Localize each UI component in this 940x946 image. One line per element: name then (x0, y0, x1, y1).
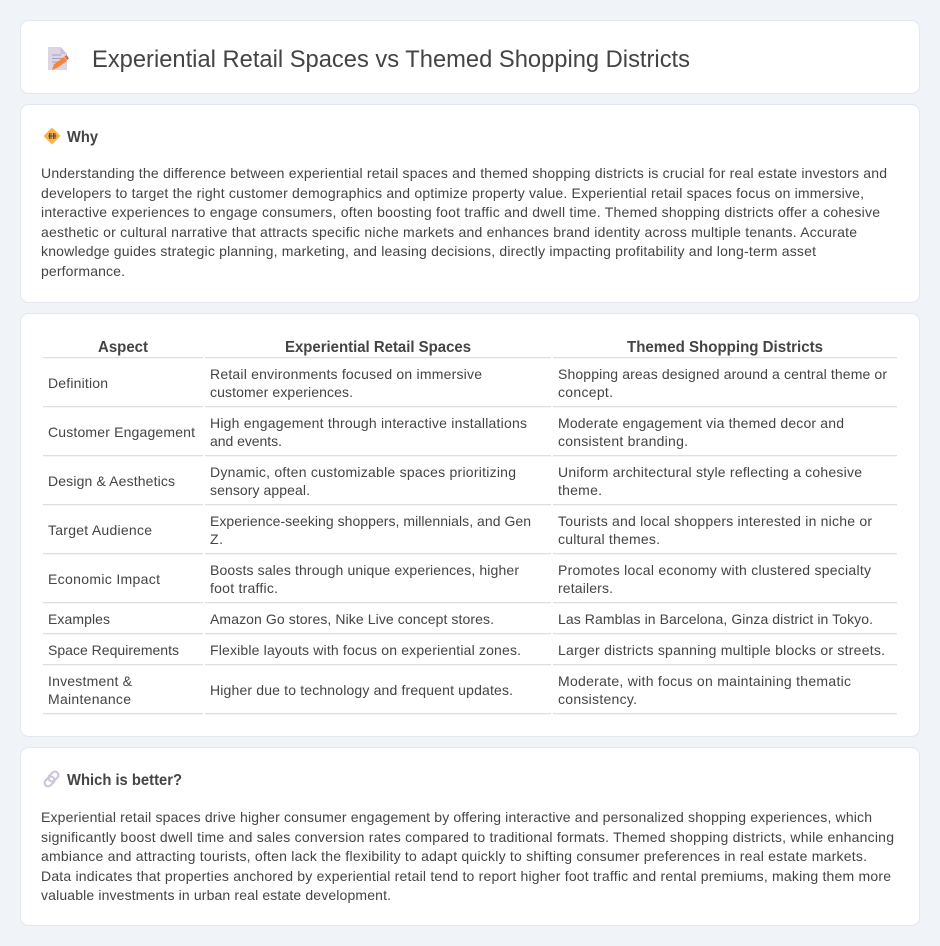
row: definition: Definition (48, 375, 108, 391)
row: definition: Retail environments focused on immersive (210, 366, 482, 382)
row: examples: Las Ramblas in Barcelona, Ginza district in Tokyo. (558, 611, 873, 627)
row: definition: concept. (558, 384, 613, 400)
row: customer engagement: High engagement through interactive installations (210, 415, 527, 431)
text block: why paragraph: Understanding the difference between experiential retail spaces and themed shopping districts is crucial for real estate investors and (41, 165, 887, 181)
text block: which is better paragraph: ambiance and attracting tourists, often lack the flexibility to adapt quickly to shifting consumer preferences in real estate markets. (41, 848, 867, 864)
row: design and aesthetics: sensory appeal. (210, 482, 310, 498)
text block: which is better paragraph: significantly boost dwell time and sales conversion rates compared to traditional formats. Themed shopping districts, while enhancing (41, 829, 894, 845)
text block: why paragraph: interactive experiences to engage consumers, often boosting foot traffic and dwell time. Themed shopping districts offer a cohesive (41, 204, 880, 220)
row: definition (48, 366, 887, 400)
heading: why: Why (67, 129, 98, 146)
row: examples: Amazon Go stores, Nike Live concept stores. (210, 611, 494, 627)
panel: which is better (20, 748, 920, 926)
row: design and aesthetics: Uniform architectural style reflecting a cohesive (558, 464, 862, 480)
row: economic impact: Promotes local economy with clustered specialty (558, 562, 871, 578)
row: space requirements (48, 642, 885, 658)
row: design and aesthetics (48, 464, 862, 498)
row: investment and maintenance: Investment & (48, 673, 133, 689)
row: investment and maintenance: Higher due to technology and frequent updates. (210, 682, 513, 698)
heading: which is better: Which is better? (67, 772, 182, 789)
row: customer engagement (48, 415, 844, 449)
row: design and aesthetics: Design & Aesthetics (48, 473, 175, 489)
row: investment and maintenance: Moderate, with focus on maintaining thematic (558, 673, 851, 689)
panel: comparison table (20, 314, 920, 736)
row: economic impact: foot traffic. (210, 580, 278, 596)
row: investment and maintenance: consistency. (558, 691, 637, 707)
row: design and aesthetics: theme. (558, 482, 602, 498)
row: design and aesthetics: Dynamic, often customizable spaces prioritizing (210, 464, 516, 480)
text block: why paragraph: developers to target the right customer demographics and optimize property value. Experiential retail spaces focus on immersive, (41, 185, 864, 201)
row: customer engagement: Moderate engagement via themed decor and (558, 415, 844, 431)
table header row (98, 339, 823, 356)
text block: why paragraph: aesthetic or cultural narrative that attracts specific niche markets and enhances brand identity across multiple tenants. Accurate (41, 224, 857, 240)
panel: title header (20, 20, 920, 94)
text block: why paragraph: performance. (41, 263, 125, 279)
row: target audience: Experience-seeking shoppers, millennials, and Gen (210, 513, 531, 529)
row: customer engagement: and events. (210, 433, 282, 449)
row: economic impact (48, 562, 871, 596)
row: customer engagement: Customer Engagement (48, 424, 195, 440)
row: economic impact: Boosts sales through unique experiences, higher (210, 562, 519, 578)
text block: which is better paragraph: valuable investments in urban real estate development. (41, 887, 391, 903)
row: definition: customer experiences. (210, 384, 353, 400)
table header row: Experiential Retail Spaces (285, 339, 471, 356)
panel: why (20, 104, 920, 302)
row: investment and maintenance (48, 673, 851, 707)
text block: which is better paragraph: Experiential retail spaces drive higher consumer engagement by offering interactive and personalized shopping experiences, which (41, 809, 872, 825)
icon: link (43, 770, 60, 788)
title: Experiential Retail Spaces vs Themed Shopping Districts (92, 46, 690, 73)
row: target audience: Z. (210, 531, 223, 547)
row: investment and maintenance: Maintenance (48, 691, 131, 707)
row: space requirements: Space Requirements (48, 642, 179, 658)
row: target audience (48, 513, 872, 547)
row: target audience: Target Audience (48, 522, 152, 538)
row: space requirements: Larger districts spanning multiple blocks or streets. (558, 642, 885, 658)
text block: which is better paragraph: Data indicates that properties anchored by experiential retail tend to report higher foot traffic and rental premiums, making them more (41, 868, 891, 884)
text block: why paragraph: knowledge guides strategic planning, marketing, and leasing decisions, directly impacting profitability and long-term asset (41, 243, 816, 259)
table header row: Aspect (98, 339, 149, 356)
row: space requirements: Flexible layouts with focus on experiential zones. (210, 642, 521, 658)
row: economic impact: retailers. (558, 580, 613, 596)
text block: which is better paragraph (41, 809, 894, 903)
table header row: Themed Shopping Districts (627, 339, 823, 356)
row: definition: Shopping areas designed around a central theme or (558, 366, 887, 382)
icon: warning diamond (44, 128, 60, 144)
row: customer engagement: consistent branding. (558, 433, 688, 449)
row: target audience: cultural themes. (558, 531, 660, 547)
row: examples: Examples (48, 611, 110, 627)
icon: document with pencil (48, 47, 69, 70)
row: target audience: Tourists and local shoppers interested in niche or (558, 513, 872, 529)
text block: why paragraph (41, 165, 887, 279)
row: economic impact: Economic Impact (48, 571, 160, 587)
row: examples (48, 611, 873, 627)
